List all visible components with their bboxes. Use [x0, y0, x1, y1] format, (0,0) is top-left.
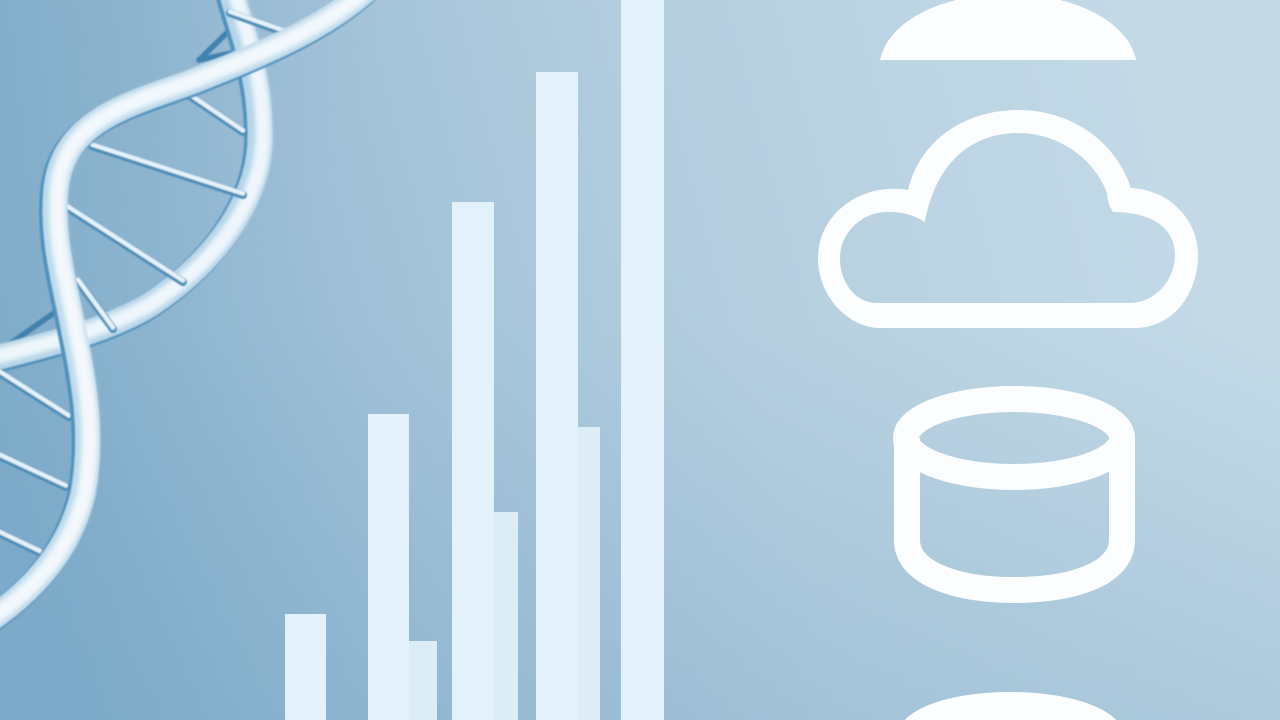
DNA front strand: [0, 0, 375, 622]
DNA rear rungs: [11, 20, 241, 344]
bar 5: [494, 512, 518, 720]
DNA rungs: [0, 12, 295, 553]
bar 2: [368, 414, 409, 720]
icon: DNA double helix: [0, 0, 375, 622]
bar 1: [285, 614, 326, 720]
bar 8: [621, 0, 664, 720]
bar 4: [452, 202, 494, 720]
icon: top dome: [880, 0, 1136, 60]
icon: bottom dome: [903, 692, 1118, 720]
bar 6: [536, 72, 578, 720]
icon: cloud: [818, 110, 1198, 328]
icon: database cylinder: [906, 399, 1122, 590]
bar 3: [409, 641, 437, 720]
bar chart: [285, 0, 664, 720]
bar 7: [578, 427, 600, 720]
DNA back strand: [0, 0, 263, 362]
